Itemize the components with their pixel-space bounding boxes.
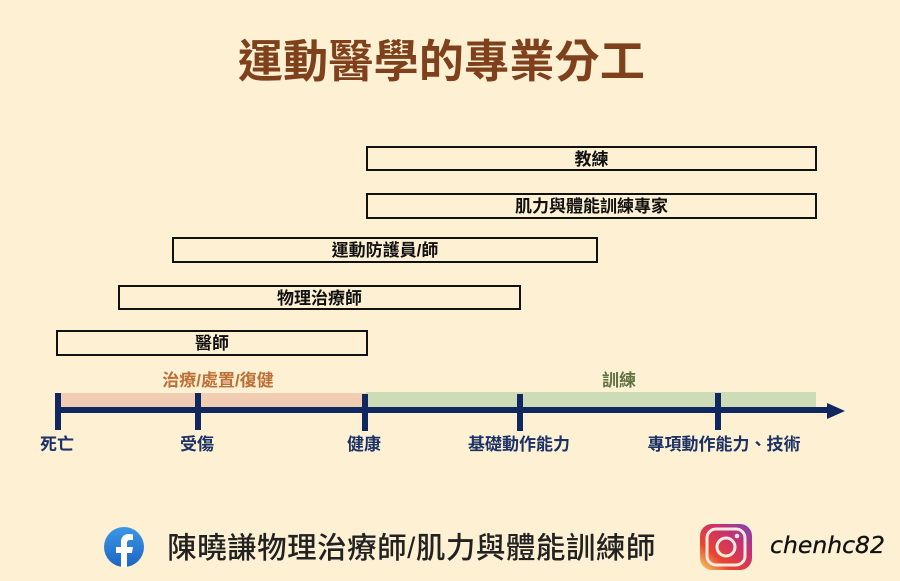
role bar: athletic trainer: 運動防護員/師 [332, 241, 438, 260]
role bar: physical therapist: 物理治療師 [277, 288, 362, 308]
axis label: specialized movement ability and skills: 專項動作能力、技術 [648, 435, 800, 454]
heading: training zone: 訓練 [602, 371, 636, 390]
axis label: injury: 受傷 [180, 435, 214, 454]
role bar: physician [56, 330, 368, 356]
role bar: strength and conditioning specialist: 肌力與體能訓練專家 [515, 197, 668, 216]
axis label: death: 死亡 [40, 435, 74, 454]
role bar: athletic trainer [172, 237, 598, 263]
title: 運動醫學的專業分工 [238, 36, 645, 87]
role bar: coach [366, 146, 817, 171]
author credit: 陳曉謙物理治療師/肌力與體能訓練師 [167, 532, 656, 565]
icon: facebook [104, 527, 144, 567]
heading: treatment zone: 治療/處置/復健 [162, 371, 274, 390]
treatment zone band [58, 393, 366, 407]
role bar: strength and conditioning specialist [366, 193, 817, 219]
role bar: coach: 教練 [574, 150, 608, 168]
training zone band [366, 392, 816, 407]
role bar: physical therapist [118, 285, 521, 310]
timeline axis [55, 393, 845, 431]
role bar: physician: 醫師 [195, 334, 229, 353]
icon: instagram [700, 524, 752, 570]
axis label: healthy: 健康 [347, 435, 381, 454]
axis label: basic movement ability: 基礎動作能力 [468, 435, 570, 454]
instagram handle: chenhc82 [770, 531, 885, 559]
